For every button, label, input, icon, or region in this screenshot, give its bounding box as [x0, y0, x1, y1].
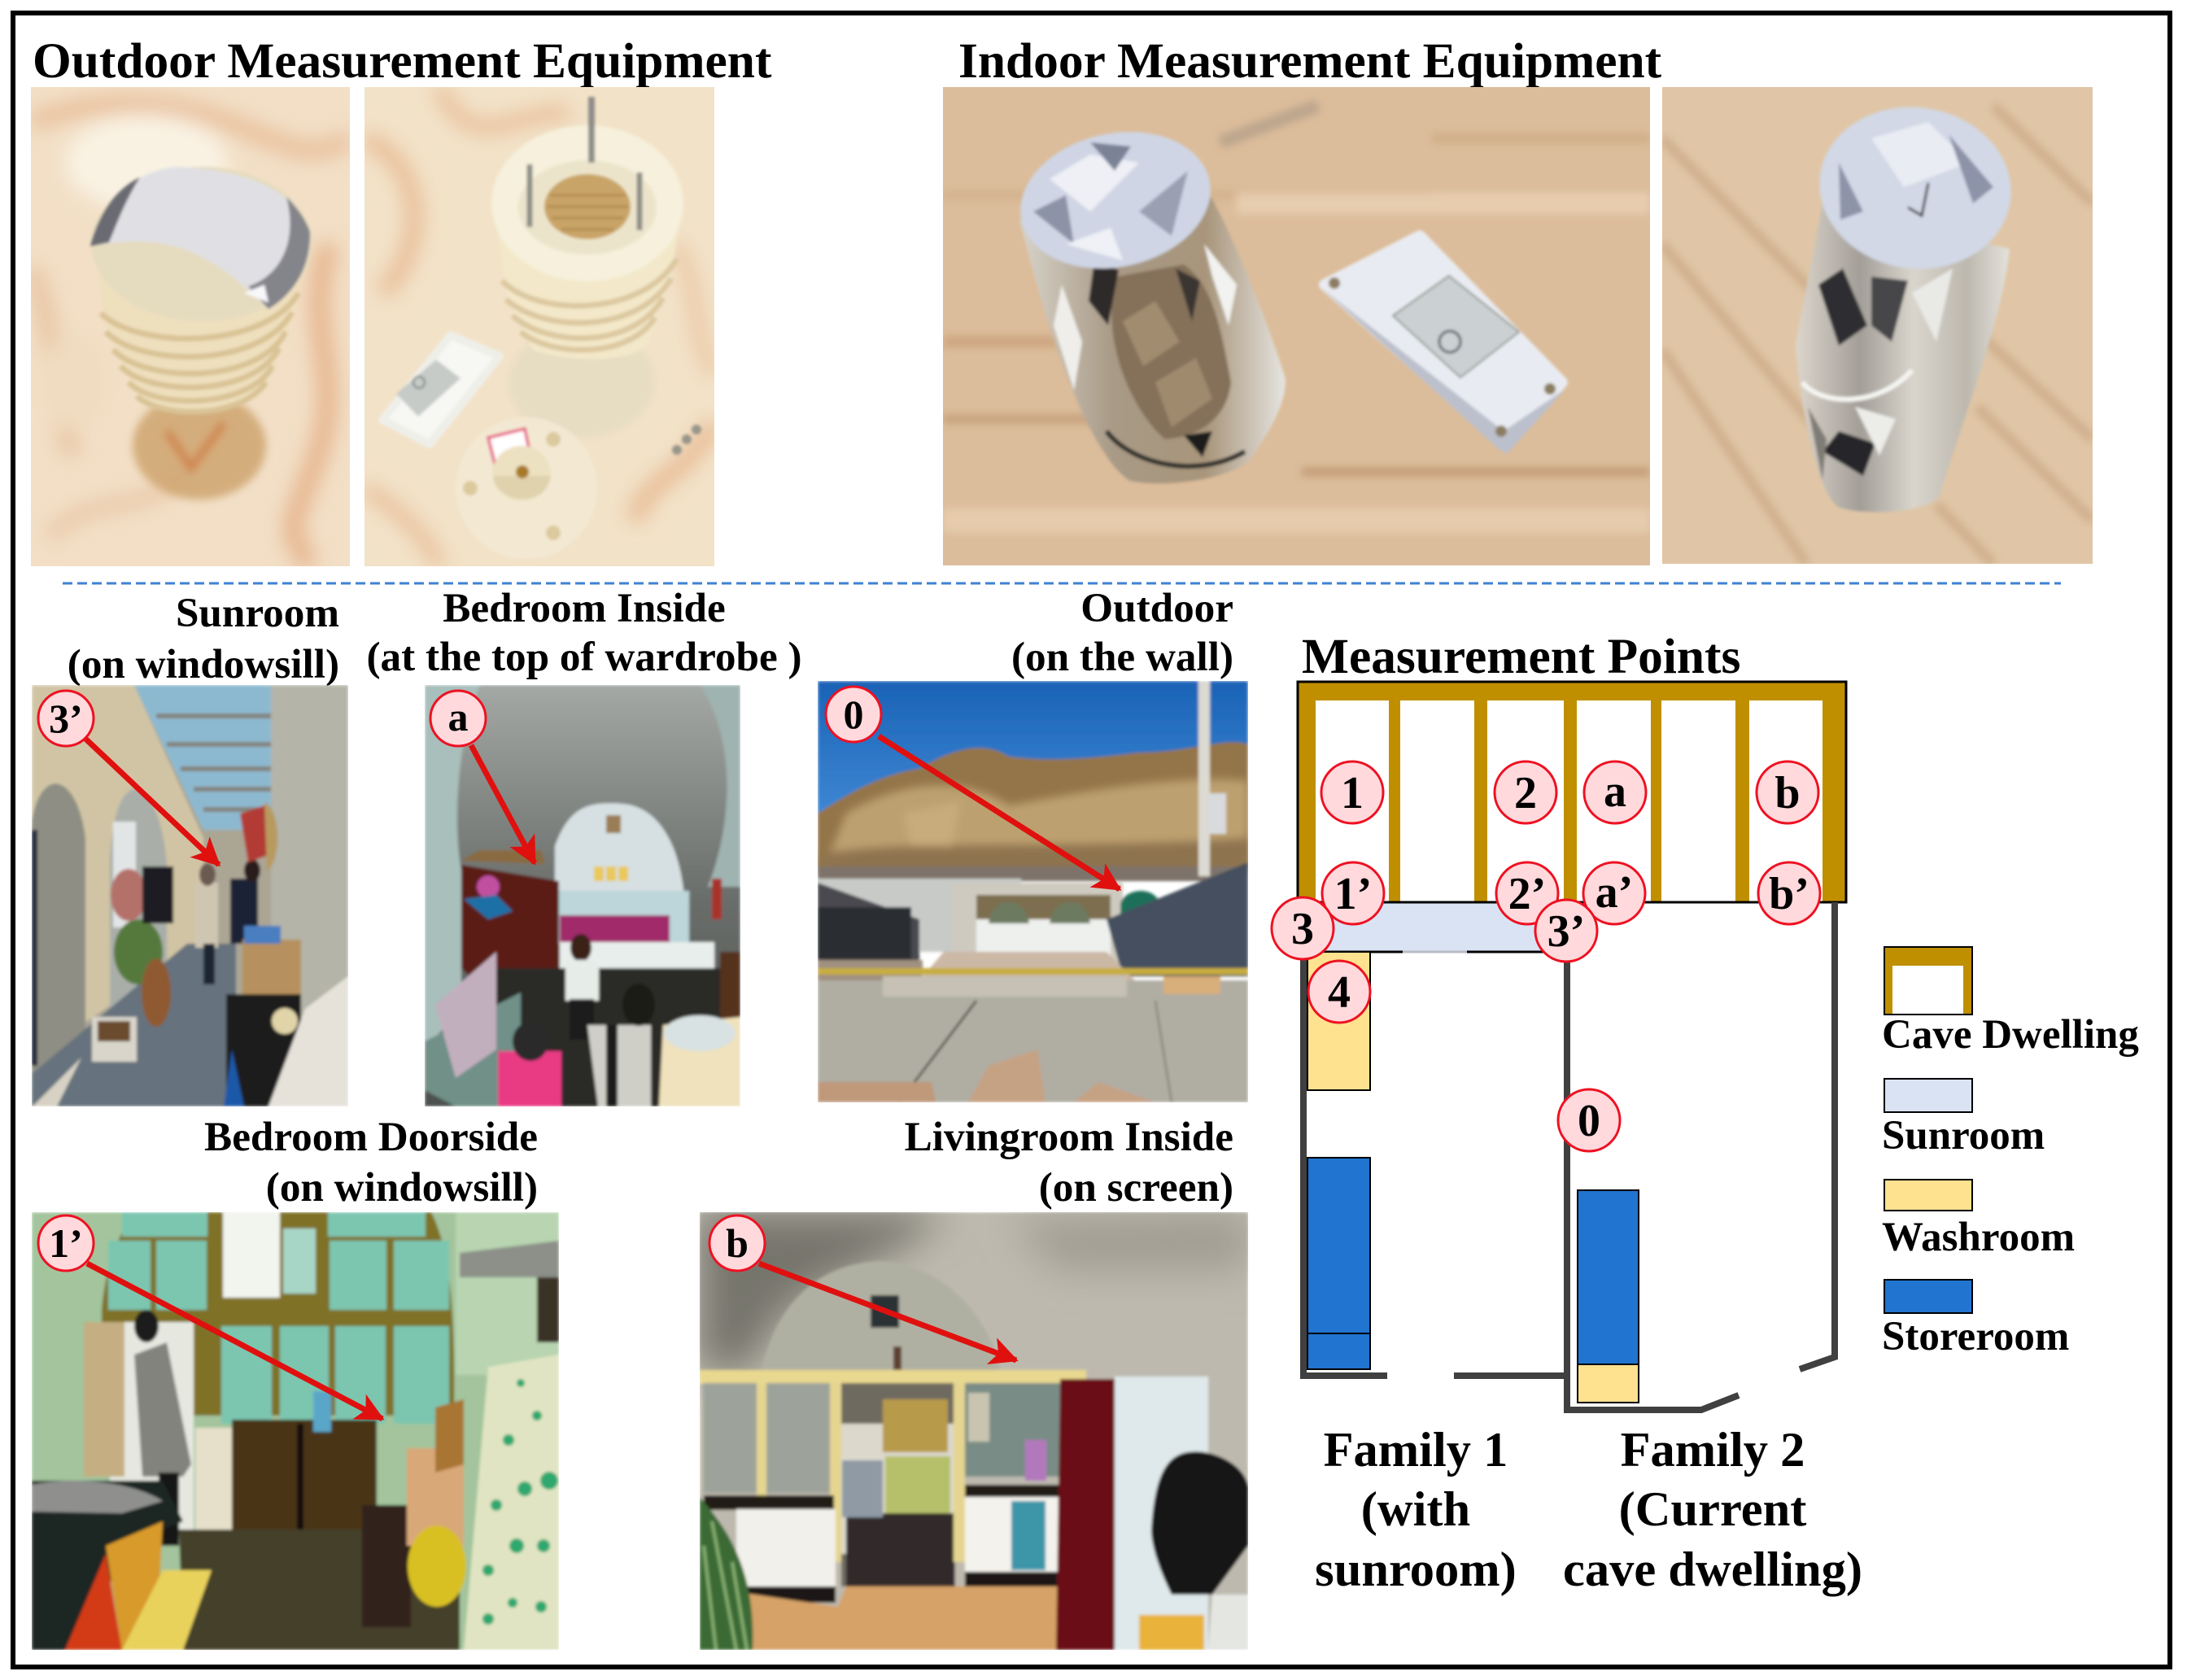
- measurement point markers: a: [1604, 766, 1626, 817]
- label: livingroom inside: (on screen): [1039, 1164, 1233, 1211]
- legend: washroom: [1882, 1180, 2075, 1260]
- floor plan: [1272, 682, 1846, 1410]
- arrow: 1' to windowsill: [87, 1263, 382, 1419]
- heading: measurement points: Measurement Points: [1302, 629, 1740, 684]
- legend: washroom: Washroom: [1882, 1215, 2075, 1260]
- label: outdoor: [1011, 585, 1233, 680]
- measurement point markers: b’: [1769, 869, 1809, 919]
- measurement point markers: 2: [1514, 768, 1537, 818]
- measurement point markers: 3’: [1547, 906, 1585, 957]
- washroom: family 1: [1307, 952, 1370, 1090]
- arrow: b to screen top: [759, 1263, 1016, 1360]
- storeroom: family 1: [1307, 1158, 1370, 1369]
- marker: 1': 1’: [49, 1220, 83, 1266]
- label: family 2: (Current: [1619, 1482, 1806, 1537]
- photo: bedroom doorside: [32, 1212, 559, 1650]
- legend: sunroom: Sunroom: [1882, 1113, 2045, 1159]
- photo: bedroom inside: [425, 685, 740, 1106]
- label: bedroom doorside: (on windowsill): [266, 1164, 538, 1211]
- measurement point markers: [1272, 761, 1820, 1151]
- marker: 1': [38, 1215, 94, 1271]
- photo: indoor foil cylinder and logger: [943, 87, 1650, 565]
- label: sunroom: [68, 590, 339, 687]
- label: bedroom doorside: [204, 1114, 538, 1211]
- label: family 1: Family 1: [1324, 1423, 1508, 1477]
- label: family 2: [1563, 1423, 1862, 1597]
- label: family 2: cave dwelling): [1563, 1543, 1862, 1597]
- marker: a: [430, 691, 486, 746]
- measurement point markers: b: [1774, 768, 1801, 818]
- measurement point markers: 4: [1328, 967, 1351, 1018]
- heading: indoor measurement equipment: Indoor Measurement Equipment: [958, 33, 1662, 89]
- legend: cave dwelling: Cave Dwelling: [1882, 1012, 2139, 1058]
- sunroom strip: [1304, 902, 1566, 952]
- marker: 0: [826, 687, 881, 742]
- measurement point markers: 3: [1291, 904, 1314, 954]
- label: bedroom doorside: Bedroom Doorside: [204, 1114, 538, 1160]
- photo: disassembled shield with logger and base: [364, 87, 714, 566]
- arrow: a to wardrobe top: [471, 745, 535, 863]
- legend: sunroom: [1882, 1079, 2045, 1159]
- storeroom: family 2: [1578, 1190, 1639, 1364]
- legend: cave dwelling: [1882, 947, 2139, 1058]
- label: family 1: [1315, 1423, 1517, 1597]
- label: livingroom inside: [905, 1114, 1233, 1211]
- photo: sunroom corridor: [32, 685, 348, 1106]
- legend: storeroom: Storeroom: [1882, 1314, 2069, 1359]
- marker: b: b: [726, 1220, 749, 1266]
- label: bedroom inside: [366, 585, 802, 680]
- label: livingroom inside: Livingroom Inside: [905, 1114, 1233, 1160]
- measurement point markers: 2’: [1508, 869, 1546, 919]
- washroom: family 2: [1578, 1364, 1639, 1403]
- legend: [1882, 947, 2139, 1359]
- measurement point markers: 1’: [1334, 869, 1372, 919]
- marker: 0: 0: [843, 692, 864, 737]
- arrow: 3' to sensor: [85, 738, 219, 865]
- marker: b: [709, 1215, 765, 1271]
- label: outdoor: (on the wall): [1011, 634, 1233, 680]
- marker: 3': [38, 691, 94, 746]
- label: bedroom inside: Bedroom Inside: [443, 585, 726, 631]
- marker: 3': 3’: [49, 696, 83, 741]
- marker: a: a: [447, 694, 469, 740]
- measurement point markers: 0: [1578, 1096, 1600, 1146]
- label: family 1: sunroom): [1315, 1543, 1517, 1597]
- legend: storeroom: [1882, 1280, 2069, 1359]
- dashed divider: [63, 583, 2061, 584]
- label: bedroom inside: (at the top of wardrobe ): [366, 634, 802, 680]
- label: family 1: (with: [1361, 1482, 1470, 1537]
- photo: outdoor radiation shield with foil top: [31, 87, 350, 566]
- label: outdoor: Outdoor: [1080, 585, 1233, 631]
- walls: family 1 and family 2: [1303, 902, 1835, 1410]
- heading: outdoor measurement equipment: Outdoor Measurement Equipment: [33, 33, 772, 89]
- photo: foil cylinder close-up: [1662, 87, 2093, 564]
- photo: livingroom inside: [700, 1212, 1248, 1650]
- measurement point markers: 1: [1341, 768, 1364, 818]
- photo: outdoor courtyard: [818, 681, 1248, 1102]
- arrow: 0 to wall sensor: [879, 736, 1120, 889]
- label: sunroom: (on windowsill): [68, 641, 339, 687]
- measurement point markers: a’: [1596, 867, 1633, 918]
- label: family 2: Family 2: [1621, 1423, 1805, 1477]
- label: sunroom: Sunroom: [176, 590, 339, 636]
- cave dwelling frame: [1298, 682, 1846, 903]
